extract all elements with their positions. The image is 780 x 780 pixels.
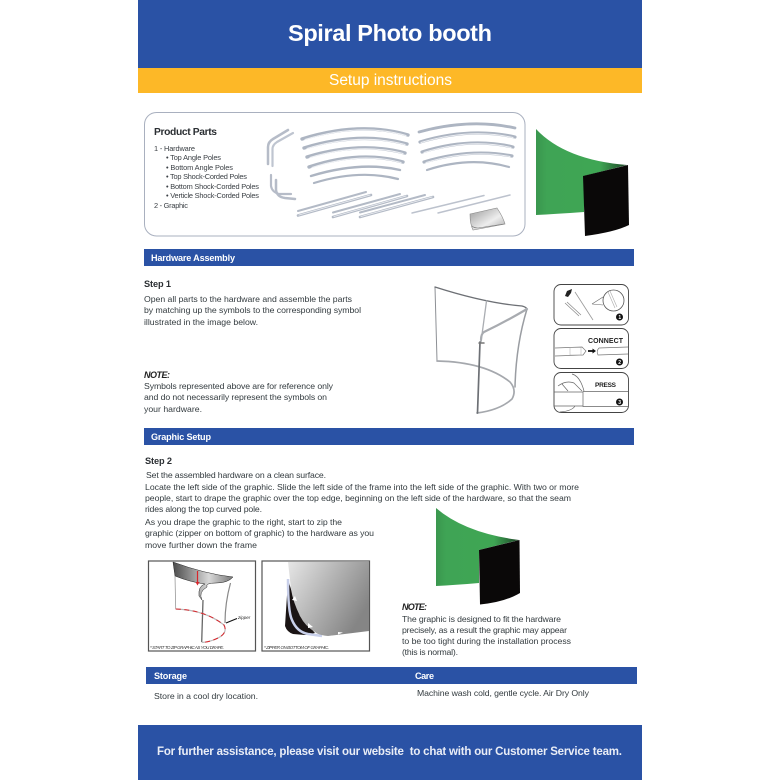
- heading: step 1: Step 1: [144, 279, 171, 289]
- text: care: Machine wash cold, gentle cycle. Air Dry Only: [417, 688, 590, 698]
- image: zipper on bottom of graphic: * ZIPPER ON BOTTOM OF GRAPHIC.: [264, 645, 329, 650]
- icon: folded graphic: [470, 208, 505, 230]
- text: step 2 instructions: As you drape the graphic to the right, start to zip the: [145, 517, 342, 527]
- text: step 1 instructions: [144, 294, 361, 327]
- section bar: graphic setup: [144, 428, 634, 445]
- parts list: [154, 144, 259, 210]
- note: graphic fit: The graphic is designed to fit the hardware: [402, 614, 561, 624]
- icon: symbol step 3 press: [554, 372, 628, 412]
- icon: symbol step 2 connect: CONNECT: [588, 338, 624, 345]
- text: step 1 instructions: by matching up the symbols to the corresponding symbol: [144, 305, 361, 315]
- note: symbols: [144, 370, 334, 414]
- icon: symbol step 2 connect: 2: [618, 360, 621, 366]
- text: storage: Store in a cool dry location.: [154, 691, 258, 701]
- subtitle band: [138, 68, 642, 93]
- icon: left group of curved poles: [302, 129, 408, 183]
- parts list: • Verticle Shock-Corded Poles: [166, 191, 259, 200]
- parts list: • Bottom Shock-Corded Poles: [166, 182, 259, 191]
- section bar: hardware assembly: [144, 249, 634, 266]
- subtitle band: Setup instructions: [329, 72, 452, 89]
- panel: product parts: [144, 112, 525, 236]
- note: symbols: NOTE:: [144, 370, 170, 380]
- image: finished booth, lower: [436, 508, 520, 604]
- icon: symbol step 2 connect: [554, 328, 628, 368]
- icon: straight poles: [298, 192, 510, 217]
- text: step 2 instructions: Locate the left side of the graphic. Slide the left side of the frame into the left side of the graphic. With two or more: [145, 482, 579, 492]
- note: symbols: Symbols represented above are for reference only: [144, 381, 334, 391]
- text: step 2 instructions: Set the assembled hardware on a clean surface.: [146, 470, 326, 480]
- text: step 2 instructions: rides along the top curved pole.: [145, 504, 262, 514]
- image: draping the graphic: zipper: [237, 615, 251, 620]
- icon: symbol step 3 press: 3: [618, 400, 621, 406]
- parts list: 1 - Hardware: [154, 144, 195, 153]
- image: finished booth, top: [536, 129, 629, 236]
- note: graphic fit: [402, 602, 572, 657]
- parts list: • Top Shock-Corded Poles: [166, 172, 247, 181]
- note: graphic fit: precisely, as a result the graphic may appear: [402, 625, 567, 635]
- image: zipper on bottom of graphic: [262, 561, 370, 651]
- icon: symbol step 1: [554, 284, 628, 325]
- image: assembled hardware frame: [435, 287, 527, 413]
- text: step 2 instructions: graphic (zipper on bottom of graphic) to the hardware as you: [145, 528, 374, 538]
- text: step 2 instructions: people, start to drape the graphic over the top edge, beginning on the left side of the hardware, so that the seam: [145, 493, 571, 503]
- icon: right group of curved poles: [419, 124, 515, 170]
- footer banner: For further assistance, please visit our website to chat with our Customer Service team.: [157, 746, 622, 758]
- header banner: [138, 0, 642, 68]
- text: step 1 instructions: Open all parts to the hardware and assemble the parts: [144, 294, 353, 304]
- section bar: storage and care: Care: [415, 671, 434, 681]
- image: draping the graphic: [148, 561, 256, 651]
- note: symbols: your hardware.: [144, 404, 202, 414]
- section bar: hardware assembly: Hardware Assembly: [151, 253, 236, 263]
- text: step 1 instructions: illustrated in the image below.: [144, 317, 258, 327]
- note: graphic fit: to be too tight during the installation process: [402, 636, 572, 646]
- section bar: storage and care: [146, 667, 637, 684]
- icon: symbol step 1: 1: [618, 315, 621, 321]
- parts list: 2 - Graphic: [154, 201, 188, 210]
- note: graphic fit: NOTE:: [402, 602, 427, 612]
- icon: angle poles: [268, 130, 295, 199]
- image: draping the graphic: * START TO ZIP GRAPHIC AS YOU DRAPE.: [150, 645, 224, 650]
- icon: symbol step 3 press: PRESS: [595, 382, 617, 389]
- title: Spiral Photo booth: [288, 20, 492, 46]
- footer banner: [138, 725, 642, 780]
- text: step 2 instructions: [145, 470, 579, 550]
- heading: product parts: Product Parts: [154, 127, 217, 138]
- section bar: storage and care: Storage: [154, 671, 187, 681]
- parts list: • Bottom Angle Poles: [166, 163, 233, 172]
- text: step 2 instructions: move further down the frame: [145, 540, 257, 550]
- note: graphic fit: (this is normal).: [402, 647, 458, 657]
- parts list: • Top Angle Poles: [166, 153, 221, 162]
- note: symbols: and do not necessarily represent the symbols on: [144, 392, 327, 402]
- heading: step 2: Step 2: [145, 456, 172, 466]
- section bar: graphic setup: Graphic Setup: [151, 432, 211, 442]
